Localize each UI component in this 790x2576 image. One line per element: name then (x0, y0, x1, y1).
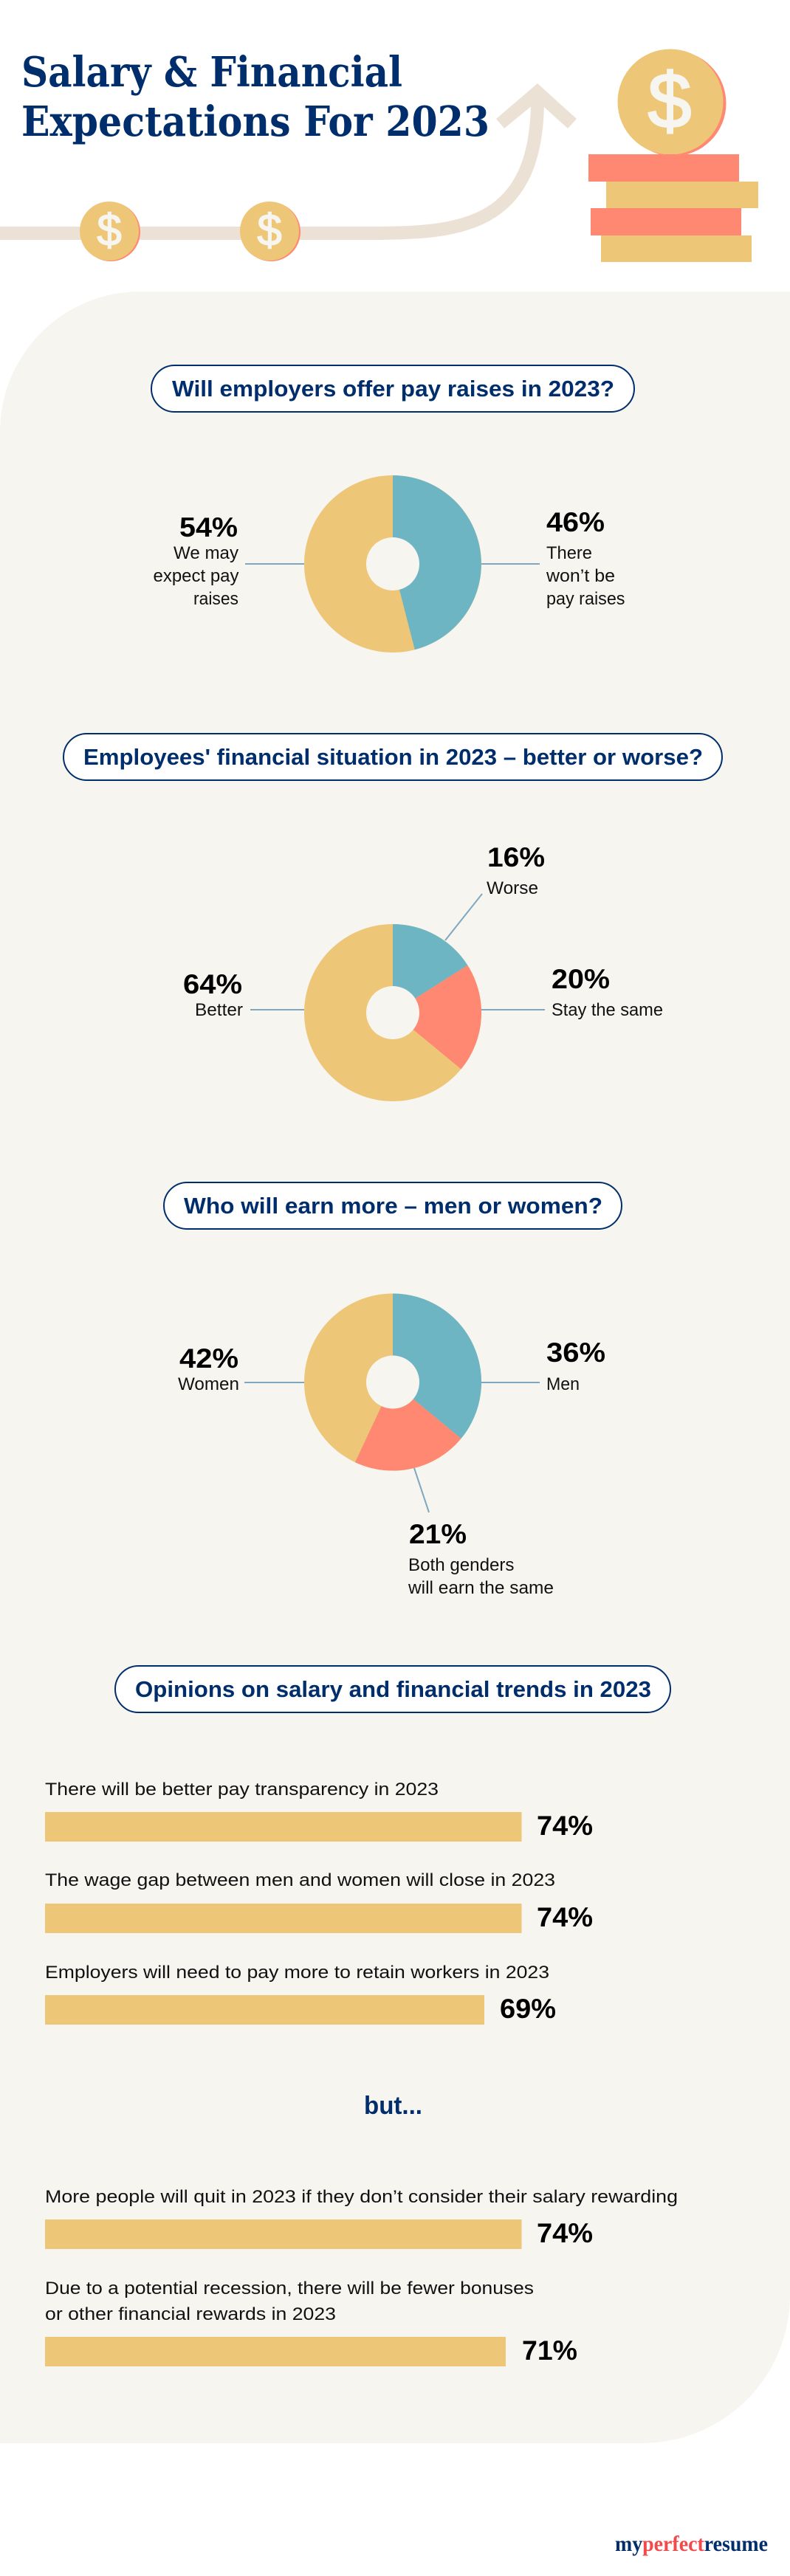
callout: 64% (183, 969, 304, 1020)
callout: 54%: expect pay (154, 566, 239, 586)
arrow: growth path (0, 83, 577, 233)
icon: small coin 2 (240, 202, 300, 261)
callout: 20%: Stay the same (552, 1000, 663, 1020)
bar: retain workers (45, 1963, 556, 2025)
bar: wage gap: The wage gap between men and women will close in 2023 (45, 1870, 555, 1890)
callout: 54% (154, 512, 304, 609)
callout: 20% (481, 964, 663, 1020)
callout: 16%: 16% (487, 842, 545, 872)
callout: 46% (481, 507, 625, 609)
callout: 42%: 42% (179, 1343, 238, 1374)
callout: 42% (178, 1343, 304, 1394)
callout: 21%: 21% (409, 1519, 467, 1549)
chart: pay raises donut (304, 475, 481, 652)
bar: fewer bonuses (45, 2279, 577, 2366)
chart: earnings donut (304, 1293, 481, 1471)
title: Expectations For 2023 (21, 97, 490, 146)
callout: 21%: Both genders (408, 1555, 514, 1575)
callout: 46%: won’t be (546, 566, 615, 586)
heading: who earns more: Who will earn more – men or women? (184, 1193, 602, 1219)
icon: coin stack: $ (648, 58, 691, 145)
heading: financial situation (63, 734, 722, 780)
heading: opinions: Opinions on salary and financial trends in 2023 (135, 1676, 651, 1702)
callout: 16%: Worse (487, 878, 538, 898)
heading: opinions (115, 1666, 670, 1712)
bar: quitting: More people will quit in 2023 if they don’t consider their salary rewarding (45, 2187, 678, 2207)
bar: quitting (45, 2187, 678, 2249)
chart: financial situation donut (304, 924, 481, 1101)
callout: 20%: 20% (552, 964, 610, 994)
callout: 46%: There (546, 543, 592, 563)
callout: 36% (481, 1337, 605, 1394)
callout: 21% (408, 1468, 554, 1598)
callout: 46%: pay raises (546, 589, 625, 609)
callout: 54%: We may (174, 543, 238, 563)
bar: fewer bonuses: 71% (522, 2335, 577, 2366)
logo: myperfectresume (615, 2532, 768, 2556)
title (21, 48, 490, 146)
callout: 64%: 64% (183, 969, 242, 999)
icon: coin stack (588, 49, 758, 262)
callout: 21%: will earn the same (408, 1578, 554, 1598)
heading: pay raises: Will employers offer pay raises in 2023? (172, 376, 614, 402)
bar: wage gap: 74% (537, 1902, 593, 1932)
callout: 42%: Women (178, 1374, 239, 1394)
heading: financial situation: Employees' financial situation in 2023 – better or worse? (83, 744, 703, 770)
callout: 46%: 46% (546, 507, 605, 537)
header illustration and title (0, 48, 758, 262)
callout: 36%: Men (546, 1374, 580, 1394)
bar: pay transparency: There will be better pay transparency in 2023 (45, 1780, 439, 1800)
heading: pay raises (151, 365, 634, 412)
heading: who earns more (164, 1182, 622, 1229)
bar: pay transparency (45, 1780, 593, 1842)
bar: fewer bonuses: Due to a potential recession, there will be fewer bonuses (45, 2279, 534, 2298)
icon: small coin 1: $ (97, 205, 122, 255)
bar: retain workers: 69% (500, 1994, 556, 2024)
bar: wage gap (45, 1870, 593, 1933)
icon: small coin 1 (80, 202, 140, 261)
bar: pay transparency: 74% (537, 1811, 593, 1841)
callout: 64%: Better (195, 1000, 243, 1020)
bar: quitting: 74% (537, 2218, 593, 2248)
callout: 54%: raises (193, 589, 238, 609)
text: but...: but... (364, 2092, 422, 2120)
bar: fewer bonuses: or other financial rewards in 2023 (45, 2304, 336, 2324)
title: Salary & Financial (21, 48, 402, 97)
bar: retain workers: Employers will need to pay more to retain workers in 2023 (45, 1963, 549, 1983)
callout: 54%: 54% (179, 512, 238, 543)
icon: small coin 2: $ (257, 205, 282, 255)
callout: 16% (445, 842, 545, 940)
callout: 36%: 36% (546, 1337, 605, 1368)
